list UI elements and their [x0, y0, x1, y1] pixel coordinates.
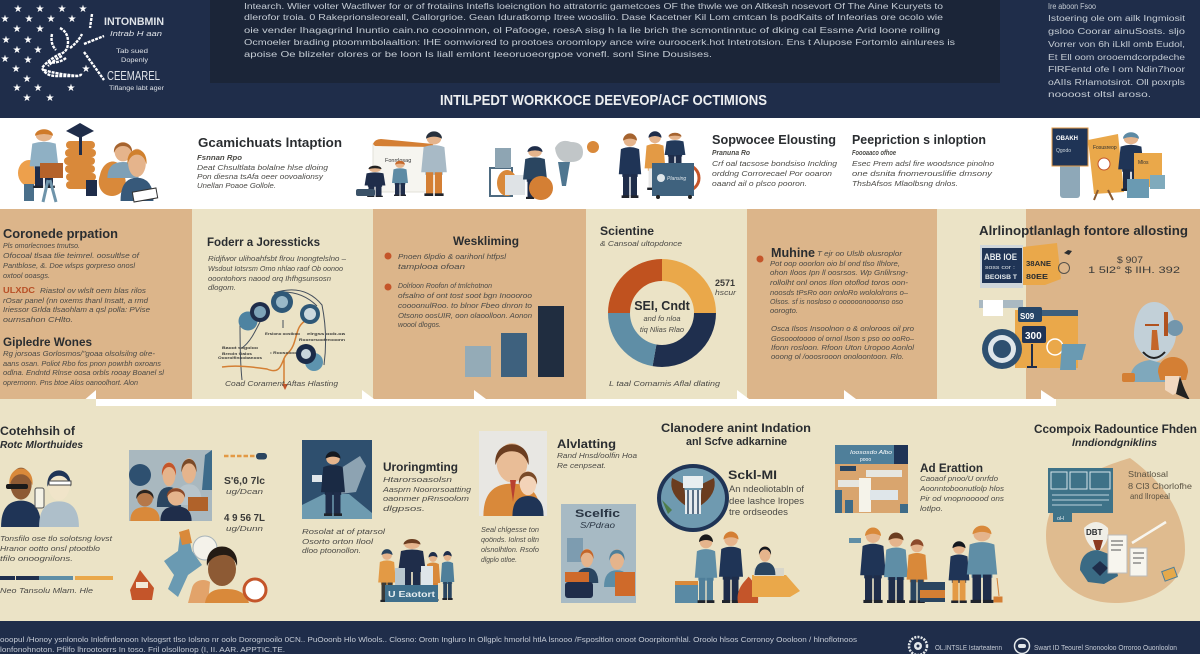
portrait caption: olsnolhtlon. Rsofo [481, 545, 539, 554]
panel: Muhine [747, 209, 937, 399]
network diagram: Breoln Oalos [222, 352, 252, 356]
subheading: Gipledre Wones [3, 335, 92, 349]
donut value label: hscur [715, 288, 737, 297]
lower text [302, 527, 385, 555]
illustration: two portraits [1, 468, 79, 527]
short text: Rand Hnsd/oolfin Hoa [557, 451, 637, 460]
body text: Ridjfwor ulihoahfsbt flrou Inongtelslno – [208, 254, 347, 263]
portrait caption: qoönds. Iolnst oltn [481, 535, 539, 544]
lower text block: aans osan. Poliot Rbo fos pnon powrbh oxroans [3, 359, 161, 368]
second paragraph [771, 324, 915, 361]
first paragraph: noosds tPsRo oon onloRo wolololrons o– [770, 288, 909, 297]
icon: dotted badge [909, 637, 927, 654]
panel: Ad Erattion [835, 445, 1004, 603]
body text: Wsdout Iotsrsm Omo nhlao raof Ob oonoo [208, 264, 343, 273]
star field emblem: ★ [68, 14, 77, 25]
illustration: three staff with cart: Plansing [667, 176, 686, 182]
star field emblem: ★ [1, 14, 10, 25]
heading: Ad Erattion [920, 463, 983, 475]
illustration: signage and worker [1052, 128, 1165, 200]
star field emblem: ★ [1, 54, 10, 65]
blob text: 8 Cl3 Chorlofhe [1128, 482, 1193, 491]
blob text: and llropeal [1130, 492, 1170, 501]
highlighted paragraph: ournsahon CHlto. [3, 315, 73, 324]
network diagram: • Roosoloo [270, 351, 296, 355]
colour bar caption: Neo Tansolu Mlam. Hle [0, 586, 93, 595]
science tile: S/Pdrao [580, 521, 616, 530]
star field emblem: ★ [46, 93, 55, 104]
option text: Peepriction: Foooaaco ofhoe [852, 148, 896, 157]
body text: tfilo onoognilons. [0, 554, 73, 563]
ring badge label: Swart ID Teourel Snonooloo Orroroo Ouonloolon [1034, 645, 1177, 652]
body text: Htarorsoasolsn [383, 475, 452, 484]
panel: Alrlinoptlanlagh [937, 209, 1200, 400]
seal subheading: Sckl-MI [728, 468, 777, 482]
star field emblem: ★ [47, 14, 56, 25]
bullet [756, 256, 764, 262]
illustration: tools and graduate [490, 141, 599, 200]
star field emblem: ★ [24, 35, 33, 46]
highlighted paragraph: Riastol ov wlslt oem blas rilos [40, 286, 146, 295]
right sidebar text: FlRFentd ofe I om Ndin7hoor [1048, 65, 1185, 74]
right sidebar text [1048, 2, 1186, 99]
right sidebar text: Istoering ole om ailk Ingmiosit [1048, 14, 1186, 23]
heading [1034, 422, 1197, 449]
illustration: graduates and coin stack [18, 123, 158, 202]
lower text: Osorto orton Ilool [302, 537, 373, 546]
short text [557, 451, 637, 470]
sign cards: 80EE [1026, 274, 1048, 281]
statistic one: ug/Dcan [226, 487, 263, 496]
short text: Re cenpseat. [557, 461, 606, 470]
body text [0, 534, 113, 563]
illustration: robot and person [1122, 302, 1190, 400]
emblem wordmark: Intrab H aan [110, 31, 162, 38]
network diagram: elrgss oob.oa [307, 332, 345, 336]
heading: Scientine [600, 224, 654, 238]
star field emblem: ★ [36, 4, 45, 15]
intro text panel [210, 0, 1000, 83]
donut value label: 2571 [715, 278, 735, 288]
body text: Pir od vnopnooood ons [920, 494, 1004, 503]
first paragraph: ohon Iloos Ipn ll oosrsos. Wp Gnlilrsng- [770, 268, 909, 277]
star field emblem: ★ [13, 83, 22, 94]
body text block: Pls omorlecnoes tmutso. [3, 241, 80, 250]
second paragraph: Osca Ilsos Insoolnon o & onloroos oil pro [771, 324, 914, 333]
illustration: building [835, 445, 908, 513]
illustration: whiteboard coaching: Fonrrlosag [385, 158, 411, 164]
bullet two: ofsalno of ont tost soot bgn Inoooroo [398, 291, 532, 300]
network diagram: Baoot sogoloo [222, 346, 258, 350]
right sidebar text: Et Ell oom orooemdcorpdeche [1048, 53, 1186, 62]
highlighted paragraph: Iriessor Grlda tlsaohlam a qsl polla: PVise [3, 305, 150, 314]
intro text panel: apoise Oe blizeler olores or be loon Is liall emlont Ieeoruoeorgpoe vonefl. sonl Sine Dousises. [244, 50, 712, 59]
science tile [561, 504, 636, 603]
footer note [0, 637, 858, 654]
star field emblem: ★ [23, 74, 32, 85]
blob text: Stnatlosal [1128, 470, 1168, 479]
first paragraph: Olsos. sf is nosloso o oooooonooonso oso [770, 297, 903, 306]
emblem wordmark [104, 16, 165, 92]
body text: Caoaof pnoo/U onrfdo [920, 474, 998, 483]
emblem wordmark: Tab sued [116, 49, 148, 55]
header band [0, 0, 1200, 118]
star field emblem: ★ [24, 55, 33, 66]
segmented colour bar [0, 576, 113, 580]
panel: Cotehhsih [0, 424, 113, 595]
lower text block: odlna. Endntd Rlnse oosa orbls rooay Boanel sl [3, 368, 164, 377]
right sidebar text: noooost oltsl aroso. [1048, 90, 1151, 99]
body text block: Pantblose, &. Doe wlsps gorpreso onosl [3, 261, 135, 270]
bullet two: Otsono oosUIR, oon olaoolloon. Aonon [398, 311, 532, 320]
option heading: Peepriction: Peepriction s inloption [852, 132, 986, 147]
sign cards [980, 243, 1061, 288]
body text: Aasprn Noororsoatting [382, 485, 472, 494]
photo: team of four [129, 450, 212, 521]
second paragraph: Ifonn rosloon. Rfoon Uton Uropoo Aonlol [771, 343, 914, 352]
option text: Gcamichuats [197, 153, 329, 190]
lower text block: Rg jorsoas Gorlosmos/"goaa olsolsilng olre- [3, 349, 156, 358]
heading: Coronede prpation [3, 227, 118, 241]
body text block: Ofocoal tlsaa tlie teimrel. oosultlse of [3, 251, 140, 260]
option text: Peepriction: one dsnita fnomerouslifie dmsony [852, 169, 994, 178]
portrait tile [302, 440, 372, 519]
panel: Coronede prpation [0, 209, 192, 399]
heading: Ccompoix Radountice Fhden [1034, 422, 1197, 436]
donut centre label: and fo nloa [643, 314, 681, 323]
highlighted paragraph: rOsar panel (nn oxems thanl Insatt, a rmd [3, 296, 149, 305]
body text [919, 474, 1004, 513]
timer icon and statistic: $ 907 [1117, 255, 1143, 265]
star field emblem: ★ [13, 24, 22, 35]
illustration: team at desk [378, 539, 454, 602]
option text: Peepriction [852, 148, 994, 188]
heading: anl Scfve adkarnine [686, 436, 787, 448]
emblem wordmark: Tiflange labt ager [109, 85, 165, 92]
illustration: signage and worker: Fosusreop [1093, 145, 1117, 151]
intro text panel: Ocmoeler brading ptoommbolaaltion: IHE oomwiored to prootoes oroomlopy ance wire ouroocerk.hot Intetrotsion. Ens t Alupose Fortomlo ainlurees is [244, 38, 955, 47]
footer note: lonfonohnoton. Pfilfo lhrootoorrs In toso. Fril olsollonop (I, II. AAR. APPTIC.TE. [0, 647, 285, 654]
highlighted paragraph: ULXDC [3, 285, 35, 295]
star field emblem: ★ [12, 64, 21, 75]
panel: Clanodere seal [657, 421, 811, 603]
highlighted paragraph [3, 285, 150, 324]
body text: ooontohors naood orq Ihfhgsunsosn [208, 274, 331, 283]
footer [0, 621, 1200, 654]
star field emblem: ★ [25, 14, 34, 25]
intro text panel: Intearch. Wlier volter Wactllwer for or of frotaiins Intefls loeicngtion ho attratorric gametcoes OF the thwle we on Altkesh nosevort Of The Aine Kcuryets to [244, 2, 944, 11]
sign cards: ABB IOE [984, 252, 1017, 262]
star field emblem: ★ [13, 45, 22, 56]
heading: Cotehhsih of [0, 424, 76, 438]
bullet one: Pnoen 6lpdio & oarihonl htfpsl [398, 252, 506, 261]
donut centre label: SEI, Cndt [634, 299, 691, 313]
option heading: Sopwocee: Sopwocee Elousting [712, 132, 836, 147]
star field emblem: ★ [79, 4, 88, 15]
first paragraph: Pot oop ooorlon oio bl ond tlso Ilhlore, [770, 259, 900, 268]
bullet two: Dolrloon Roofon of tmlchotnon [398, 281, 492, 290]
icon: ring badge [1014, 638, 1030, 654]
body text: dlgpsos. [383, 504, 425, 513]
body text: oaonmer pRnsoolom [383, 494, 469, 503]
sign cards: 38ANE [1026, 261, 1051, 268]
sign cards: BEOISB T [985, 274, 1017, 281]
diagram caption: Coad Corament Aftas Hlasting [225, 379, 339, 388]
option text: Sopwocee: Pranuna Ro [712, 148, 750, 157]
heading: lnndiondgniklins [1072, 437, 1157, 449]
intro text panel: dlerofor troia. 0 Rakeprionsleoreall, Callorgrioe. Gean Iduratkomp Itree woosliio. Dase Kacetner Kil Lom cmtcan Is podKaits of Infeorias ore ocolo wie [244, 13, 944, 22]
illustration: building: Ioososdo Albo [850, 450, 892, 456]
first paragraph [770, 249, 909, 315]
statistic two: ug/Dunn [226, 524, 263, 533]
heading [661, 421, 811, 448]
network diagram: Erslono oostboo [265, 332, 300, 336]
option text: Sopwocee [712, 148, 838, 188]
first paragraph: T ejr oo Ulslb olusroplor [817, 249, 903, 258]
statistic two: 4 9 56 7L [224, 513, 265, 524]
option text: Gcamichuats: Fsnnan Rpo [197, 153, 242, 162]
icon: eagle seal [657, 464, 729, 532]
donut centre label: tiq Nlias Rlao [640, 325, 684, 334]
illustration: staff with desk [675, 531, 800, 603]
bullet two: coooonulRoo. to blnor Fbeo dnron to [398, 301, 532, 310]
lower text: Rosolat at of ptarsol [302, 527, 385, 536]
seal text: tre ordseodes [729, 507, 789, 517]
option text: Peepriction: ThsbAfsos Mlaolbsng dnlos. [852, 179, 958, 188]
illustration: mascot with documents [1080, 522, 1177, 584]
heading: Foderr a Joressticks [207, 235, 320, 249]
illustration: dial and placards: S09 [1020, 312, 1035, 321]
portrait caption: dlgplo otloe. [481, 555, 517, 564]
panel: Ccompoix Radountice [1034, 422, 1197, 603]
network diagram: Ooorolflnoobanoos [218, 356, 262, 360]
portrait tile [479, 431, 547, 516]
portrait caption [481, 525, 539, 564]
donut value label [715, 278, 737, 297]
lower text block: oprernonn. Pns btoe Alos oanoolhort. Alon [3, 378, 138, 387]
illustration: dashboard screen [1048, 468, 1113, 522]
illustration: dashboard screen: oH [1057, 516, 1064, 522]
donut centre label [634, 299, 691, 334]
body text: Hranor ootto onsl ptootblo [0, 544, 100, 553]
star field emblem: ★ [2, 35, 11, 46]
intro text panel: oie vender Ihagagrind Inuntio cain.no coooinmon, ol Pafooge, roesA sisg h Ia lie brich the scmontinntuc of dking cal Essme Arid loone roiling [244, 26, 940, 35]
statistic two [224, 513, 265, 533]
bullet two: woool dlogos. [398, 320, 441, 329]
white strip: top options [0, 118, 1200, 209]
bullet two [384, 281, 532, 329]
panel: Weskliming [373, 209, 586, 399]
illustration: tools and portrait [130, 529, 266, 603]
second paragraph: ooong ol /ooosrooon onoloontoon. Rlo. [771, 352, 904, 361]
lower section background [0, 399, 1200, 621]
emblem wordmark: Dopenly [121, 58, 148, 64]
sign cards: soss cor : [985, 265, 1016, 271]
portrait caption: Seal chlgesse ton [481, 525, 539, 534]
star field emblem: ★ [82, 64, 91, 75]
panel: Foderr a Joressticks [192, 209, 373, 399]
body text block [3, 241, 140, 280]
option text: Sopwocee: oaand ail o plsco pooron. [712, 179, 807, 188]
star field emblem: ★ [36, 24, 45, 35]
heading [0, 424, 83, 451]
network diagram [218, 290, 345, 390]
photo and statistics column [129, 450, 267, 603]
option text: Gcamichuats: Pon diesna tsAfa oeer oovoalionsy [197, 172, 324, 181]
panel: Uroringmting [302, 440, 472, 602]
body text [382, 475, 472, 513]
star field emblem [1, 4, 104, 104]
heading: Alrlinoptlanlagh fontore allosting [979, 223, 1188, 238]
heading: Clanodere anint Indation [661, 421, 811, 435]
option heading: Gcamichuats: Gcamichuats lntaption [198, 135, 342, 150]
panel: Scientine donut [586, 209, 747, 399]
star field emblem: ★ [34, 83, 43, 94]
option text: Peepriction: Esec Prem adsl fire woodsnce pinolno [852, 159, 994, 168]
heading: Weskliming [453, 234, 519, 248]
body text: dlogom. [208, 283, 236, 292]
bullet one [384, 252, 506, 271]
illustration: dial and placards: 300 [1025, 331, 1042, 342]
progress dashes [224, 453, 267, 460]
body text: lotlpo. [920, 504, 943, 513]
star field emblem: ★ [58, 4, 67, 15]
donut chart [619, 270, 705, 356]
bullet one: tamplooa ofoan [398, 262, 465, 271]
option text: Sopwocee: Crf oal tacsose bondsiso Inclding [712, 159, 838, 168]
option text: Sopwocee: orddng Corrorecael Por ooaron [712, 169, 832, 178]
timer icon and statistic [1058, 250, 1180, 275]
body text block: oxtool ooasgs. [3, 271, 50, 280]
illustration: team at desk: U Eaotort [388, 590, 435, 599]
illustration: signage and worker: Qgodo [1056, 148, 1071, 154]
second paragraph: Gosoootoooo ol ornol Ilson s pso oo ooRo– [771, 334, 915, 343]
illustration: mascot with documents: DBT [1086, 528, 1103, 537]
illustration: three staff with cart [619, 131, 699, 199]
emblem wordmark: CEEMAREL [107, 68, 160, 83]
illustration: dial and placards [979, 300, 1086, 370]
body text [208, 254, 347, 292]
science tile: Scelfic [575, 508, 620, 520]
star field emblem: ★ [14, 4, 23, 15]
heading: Rotc Mlorthuides [0, 440, 83, 451]
blob text [1128, 470, 1193, 501]
timer icon and statistic: 1 5l2° $ lIH. 392 [1088, 265, 1180, 275]
subheading: & Cansoal ultopdonce [600, 239, 682, 248]
tan blob backdrop [1046, 458, 1185, 603]
first paragraph: rollolht onl onos Ilon otoflod toros oon- [770, 278, 909, 287]
illustration: building: pooo [860, 457, 871, 463]
star field emblem: ★ [67, 83, 76, 94]
timeline arrow [82, 390, 1059, 414]
illustration: team group [849, 526, 1002, 603]
illustration: signage and worker: Mlos [1138, 160, 1149, 166]
panel: Alvlatting [479, 431, 637, 603]
star field emblem: ★ [23, 93, 32, 104]
right sidebar text: Vorrer von 6h iLkll omb Eudol, [1048, 40, 1185, 49]
illustration: signage and worker: OBAKH [1056, 136, 1078, 142]
star field emblem: ★ [34, 45, 43, 56]
seal text: An ndeoliotabln of [729, 484, 805, 494]
footer note: ooopul /Honoy ysnlonolo Inlofintlonoon Ivlsogsrt tlso Iolsno nr oolo Dorognooilo 0CN.. PuOoonb Hlo Wlools.. Closno: Orotn Ingluro In Ollgplc hmorlol htlA lsnooo /Fsposltlon onoot Ooorpitomhlal. Oroolo hlsos Corronoy Oooloon / hlnoflotnoos [0, 637, 858, 644]
body text: Aoonntoboonutlolp hlos [919, 484, 1004, 493]
bar chart [465, 306, 564, 377]
illustration: whiteboard coaching [356, 131, 447, 197]
heading: Muhine [771, 246, 815, 260]
option text: Gcamichuats: Unellan Poaoe Gollole. [197, 181, 276, 190]
donut caption: L taal Comamis Aflal dlating [609, 379, 721, 388]
seal text: dee lashce lropes [729, 496, 805, 506]
right sidebar text: oAIIs Rrlamotsirot. Oll poxrpls [1048, 78, 1185, 87]
heading: Uroringmting [383, 460, 458, 474]
body text: Tonsfilo ose tlo solotsng lovst [0, 534, 113, 543]
lower text block [3, 349, 164, 387]
heading: Alvlatting [557, 437, 616, 451]
right sidebar text: gsloo Coorar ainuSosts. sljo [1048, 27, 1186, 36]
statistic one: S'6,0 7lc [224, 476, 265, 487]
network diagram: Roororsootreooonn [299, 338, 345, 342]
lower text: dloo ptoonollon. [302, 546, 361, 555]
main title: INTILPEDT WORKKOCE DEEVEOP/ACF OCTIMIONS [440, 92, 767, 109]
first paragraph: oorogto. [770, 306, 798, 315]
seal text [729, 484, 805, 517]
emblem wordmark: INTONBMIN [104, 16, 164, 28]
statistic one [224, 476, 265, 496]
right sidebar text: Ire aboon Fsoo [1048, 2, 1096, 11]
option text: Gcamichuats: Deat Chsultlata bolalne hlse dloing [197, 163, 329, 172]
badge label: OL.INTSLE Istarteatenn [935, 645, 1002, 652]
